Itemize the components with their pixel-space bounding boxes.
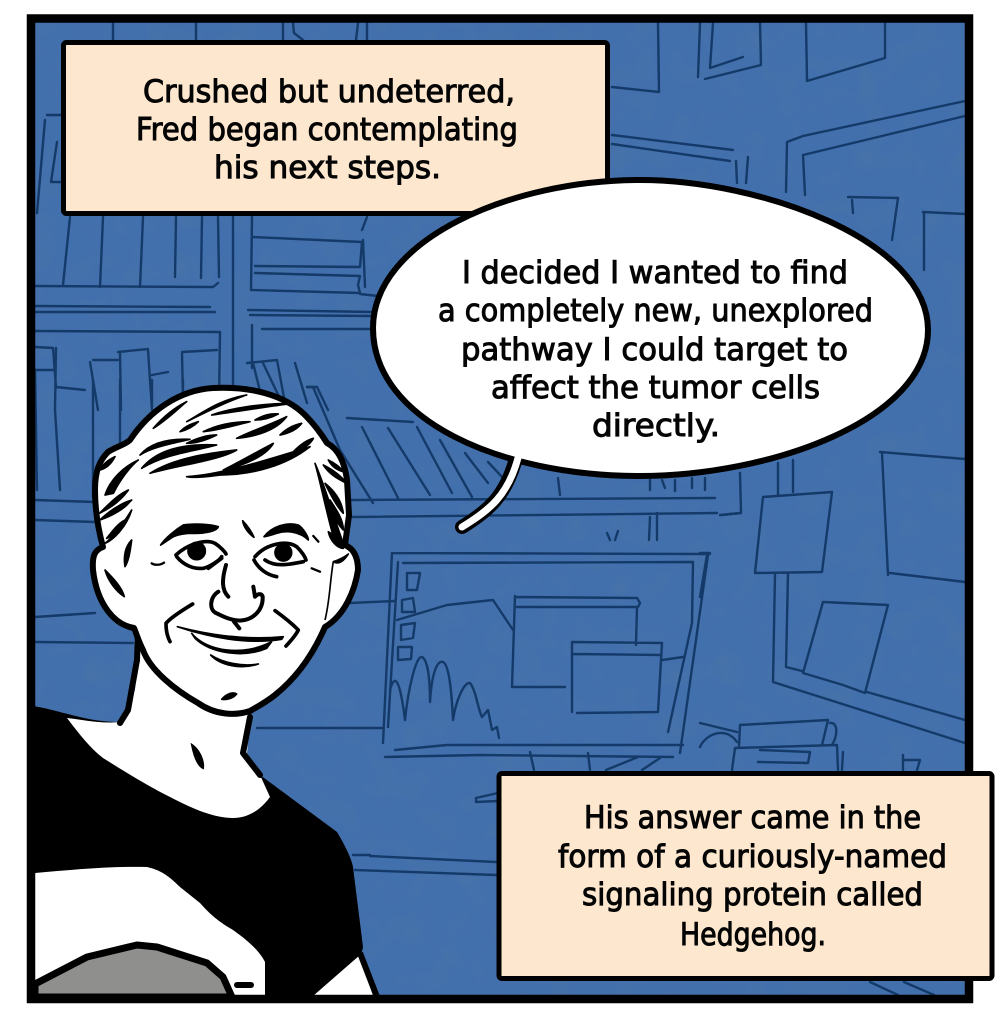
bubble text: pathway I could target to [461,332,848,368]
caption box: bottom [499,774,992,978]
bubble text: a completely new, unexplored [438,293,873,329]
face details [99,395,348,699]
neck and chest [67,630,270,818]
nose [211,565,263,628]
character: Fred [33,388,377,997]
bubble text: directly. [592,408,720,444]
shirt [33,706,363,997]
caption box: top: Crushed but undeterred, [143,74,515,110]
monitor [383,553,710,757]
neck outlines [120,633,260,775]
ears [105,570,124,597]
bubble text: affect the tumor cells [491,370,820,406]
gray sleeve patch [35,945,232,997]
hair strands [140,395,313,477]
right side [700,452,965,743]
smile lines [166,604,298,646]
bubble text: I decided I wanted to find [462,255,848,291]
caption box: bottom: Hedgehog. [680,917,826,953]
wrinkles [152,536,320,572]
caption box: top: Fred began contemplating [136,112,518,148]
caption box: bottom: form of a curiously-named [558,839,947,875]
caption box: top: his next steps. [214,150,441,186]
right sleeve gap [313,955,373,996]
arm edge [360,953,377,997]
lower lip and chin [211,655,258,699]
side hair [99,457,347,567]
caption box: bottom: His answer came in the [584,800,921,836]
arm [35,867,265,995]
top right [612,23,965,195]
mouth [177,627,283,654]
eyes [188,542,205,560]
head outline [93,388,358,714]
caption box: bottom: signaling protein called [582,877,923,913]
shelves top left [113,23,367,40]
caption box: top [64,42,608,214]
bubble text [438,255,873,444]
eyebrows [161,521,308,545]
bubble body [373,180,928,476]
neck crease [192,745,203,768]
bubble tail outline [462,462,515,527]
speech bubble [373,180,928,527]
bubble tail fill [462,458,518,527]
small dash [237,982,251,988]
